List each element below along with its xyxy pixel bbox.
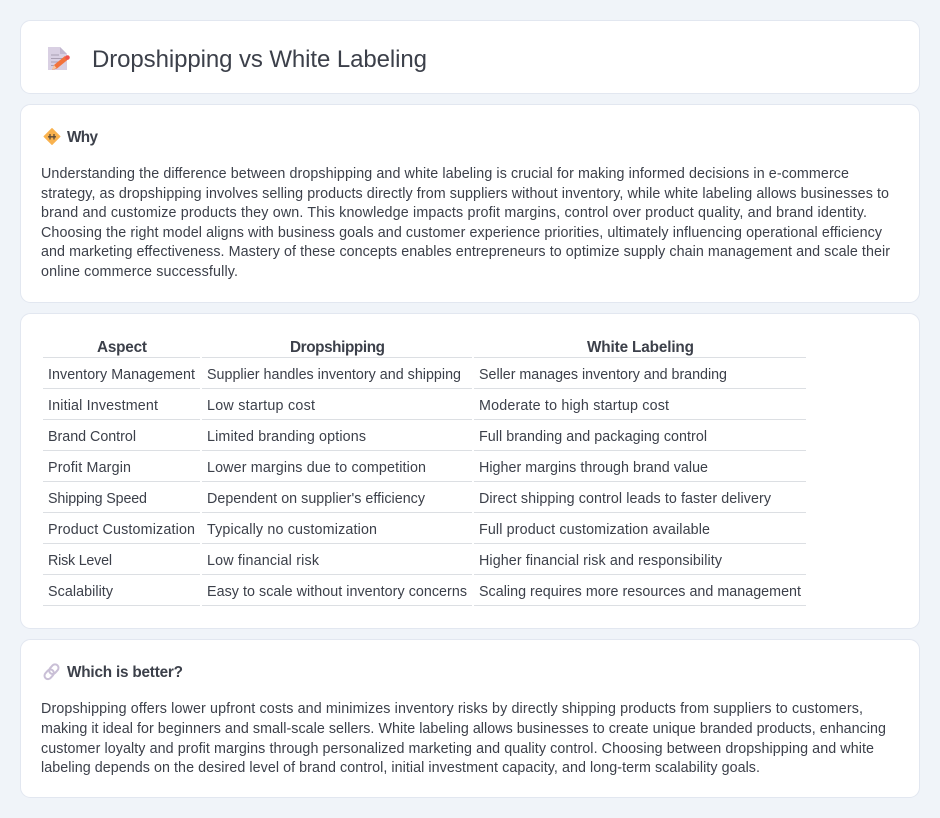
- row: scalability: [48, 584, 801, 600]
- text block: why paragraph: [41, 166, 890, 280]
- text block: why paragraph: brand and customize products they own. This knowledge impacts profit margins, control over product quality, and brand identity.: [41, 205, 867, 221]
- title: Dropshipping vs White Labeling: [92, 46, 427, 73]
- panel: why: [20, 104, 920, 302]
- table header row: Dropshipping: [290, 339, 385, 356]
- row: scalability: Easy to scale without inventory concerns: [207, 584, 467, 600]
- icon: chain link: [43, 663, 60, 681]
- row: risk level: Higher financial risk and responsibility: [479, 553, 723, 569]
- row: initial investment: Low startup cost: [207, 398, 315, 414]
- row: shipping speed: Shipping Speed: [48, 491, 147, 507]
- row: scalability: Scaling requires more resources and management: [479, 584, 801, 600]
- row: scalability: Scalability: [48, 584, 114, 600]
- panel: header: [20, 20, 920, 94]
- row: risk level: Low financial risk: [207, 553, 320, 569]
- row: profit margin: Lower margins due to competition: [207, 460, 426, 476]
- row: brand control: Brand Control: [48, 429, 136, 445]
- table header row: White Labeling: [587, 339, 694, 356]
- row: brand control: Full branding and packaging control: [479, 429, 707, 445]
- row: initial investment: Moderate to high startup cost: [479, 398, 669, 414]
- row: initial investment: [48, 398, 669, 414]
- heading: why: Why: [67, 129, 98, 146]
- text block: which is better paragraph: customer loyalty and profit margins through personalized marketing and quality control. Choosing between dropshipping and white: [41, 741, 874, 757]
- text block: which is better paragraph: Dropshipping offers lower upfront costs and minimizes inventory risks by directly shipping products from suppliers to customers,: [41, 701, 863, 717]
- row: product customization: Typically no customization: [207, 522, 377, 538]
- row: initial investment: Initial Investment: [48, 398, 158, 414]
- text block: why paragraph: and marketing effectiveness. Mastery of these concepts enables entrepreneurs to optimize supply chain management and scale their: [41, 244, 890, 260]
- text block: why paragraph: strategy, as dropshipping involves selling products directly from suppliers without inventory, while white labeling allows businesses to: [41, 186, 889, 202]
- row: inventory management: [48, 367, 727, 383]
- row: product customization: Product Customization: [48, 522, 195, 538]
- text block: which is better paragraph: making it ideal for beginners and small-scale sellers. White labeling allows businesses to create unique branded products, enhancing: [41, 721, 886, 737]
- row: product customization: [48, 522, 710, 538]
- text block: why paragraph: Understanding the difference between dropshipping and white labeling is crucial for making informed decisions in e-commerce: [41, 166, 849, 182]
- row: product customization: Full product customization available: [479, 522, 710, 538]
- row: profit margin: [48, 460, 708, 476]
- panel: which is better: [20, 640, 920, 798]
- row: inventory management: Supplier handles inventory and shipping: [207, 367, 461, 383]
- panel: comparison table: [20, 314, 920, 628]
- text block: which is better paragraph: labeling depends on the desired level of brand control, initial investment capacity, and long-term scalability goals.: [41, 760, 760, 776]
- text block: which is better paragraph: [41, 701, 886, 776]
- row: inventory management: Seller manages inventory and branding: [479, 367, 727, 383]
- row: shipping speed: [48, 491, 772, 507]
- heading: which is better: Which is better?: [67, 664, 183, 681]
- icon: warning diamond: [44, 128, 60, 144]
- row: shipping speed: Dependent on supplier's efficiency: [207, 491, 426, 507]
- icon: document with pencil: [48, 47, 70, 70]
- table header row: Aspect: [97, 339, 147, 356]
- row: brand control: [48, 429, 707, 445]
- row: inventory management: Inventory Management: [48, 367, 195, 383]
- row: brand control: Limited branding options: [207, 429, 366, 445]
- text block: why paragraph: online commerce successfully.: [41, 264, 238, 280]
- text block: why paragraph: Choosing the right model aligns with business goals and customer experience priorities, ultimately influencing operational efficiency: [41, 225, 883, 241]
- row: risk level: Risk Level: [48, 553, 112, 569]
- row: profit margin: Higher margins through brand value: [479, 460, 708, 476]
- row: risk level: [48, 553, 723, 569]
- row: shipping speed: Direct shipping control leads to faster delivery: [479, 491, 772, 507]
- table header row: [97, 339, 694, 356]
- row: profit margin: Profit Margin: [48, 460, 131, 476]
